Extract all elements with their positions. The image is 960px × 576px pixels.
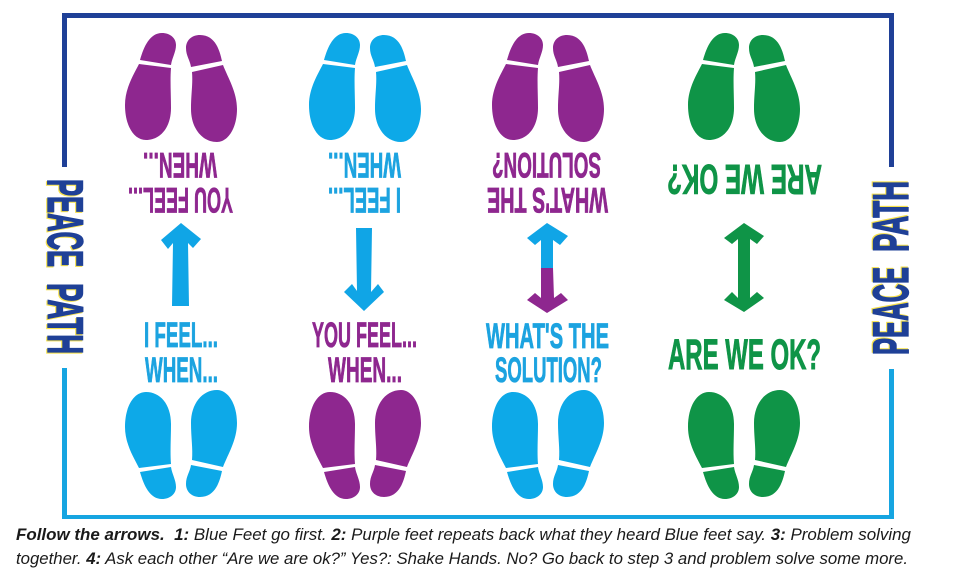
- panel: step 1 I feel: [125, 33, 237, 499]
- side label: left peace path: PEACE: [36, 180, 92, 268]
- panel: step 3 solution: [486, 33, 609, 499]
- arrow: down blue: [344, 228, 384, 311]
- icon: purple feet bottom: [309, 390, 421, 499]
- icon: green feet top: [688, 33, 800, 142]
- caption: instructions: Follow the arrows. 1: Blue Feet go first. 2: Purple feet repeats back what they heard Blue feet say. 3: Problem solving: [16, 526, 912, 544]
- icon: purple feet top: [125, 33, 237, 142]
- side label: left peace path: PEACE: [37, 179, 93, 267]
- upside-down label: what's the solution: SOLUTION?: [492, 145, 601, 184]
- panel: step 2 you feel: [309, 33, 421, 499]
- panel: step 4 are we ok: [667, 33, 822, 499]
- label: what's the solution: [486, 317, 609, 390]
- upside-down label: what's the solution: WHAT'S THE: [487, 180, 608, 219]
- upside-down label: I feel when: WHEN...: [328, 145, 401, 184]
- icon: blue feet bottom: [125, 390, 237, 499]
- side label: right peace path: PATH: [862, 180, 918, 251]
- label: you feel when: [312, 316, 417, 390]
- side label: right peace path: PEACE: [863, 267, 919, 355]
- arrow: two-way green: [724, 223, 764, 312]
- upside-down label: are we ok: ARE WE OK?: [667, 156, 822, 203]
- label: I feel when: I FEEL...: [144, 316, 218, 355]
- icon: green feet bottom: [688, 390, 800, 499]
- icon: blue feet top: [309, 33, 421, 142]
- label: you feel when: YOU FEEL...: [312, 316, 417, 355]
- caption: instructions: [16, 526, 912, 568]
- arrow: two-way blue and purple: [527, 223, 568, 313]
- upside-down label: you feel when: WHEN...: [143, 145, 217, 184]
- side label: left peace path: PATH: [36, 284, 92, 355]
- upside-down label: I feel when: [328, 145, 401, 219]
- upside-down label: what's the solution: [487, 145, 608, 219]
- frame: peace path border: [62, 13, 894, 519]
- label: you feel when: WHEN...: [328, 351, 402, 390]
- upside-down label: you feel when: YOU FEEL...: [128, 180, 233, 219]
- label: I feel when: WHEN...: [145, 351, 218, 390]
- label: what's the solution: SOLUTION?: [495, 351, 602, 390]
- caption: instructions: together. 4: Ask each other “Are we are ok?” Yes?: Shake Hands. No? Go back to step 3 and problem solve some more.: [16, 550, 908, 568]
- label: I feel when: [144, 316, 218, 390]
- side label: right peace path: PEACE: [862, 266, 918, 354]
- side label: left peace path: PATH: [37, 283, 93, 354]
- side label: right peace path: PATH: [863, 181, 919, 252]
- upside-down label: I feel when: I FEEL...: [328, 180, 401, 219]
- icon: purple feet top: [492, 33, 604, 142]
- icon: blue feet bottom: [492, 390, 604, 499]
- arrow: up blue: [161, 223, 201, 306]
- upside-down label: you feel when: [128, 145, 233, 219]
- label: what's the solution: WHAT'S THE: [486, 317, 609, 356]
- label: are we ok: ARE WE OK?: [668, 331, 821, 379]
